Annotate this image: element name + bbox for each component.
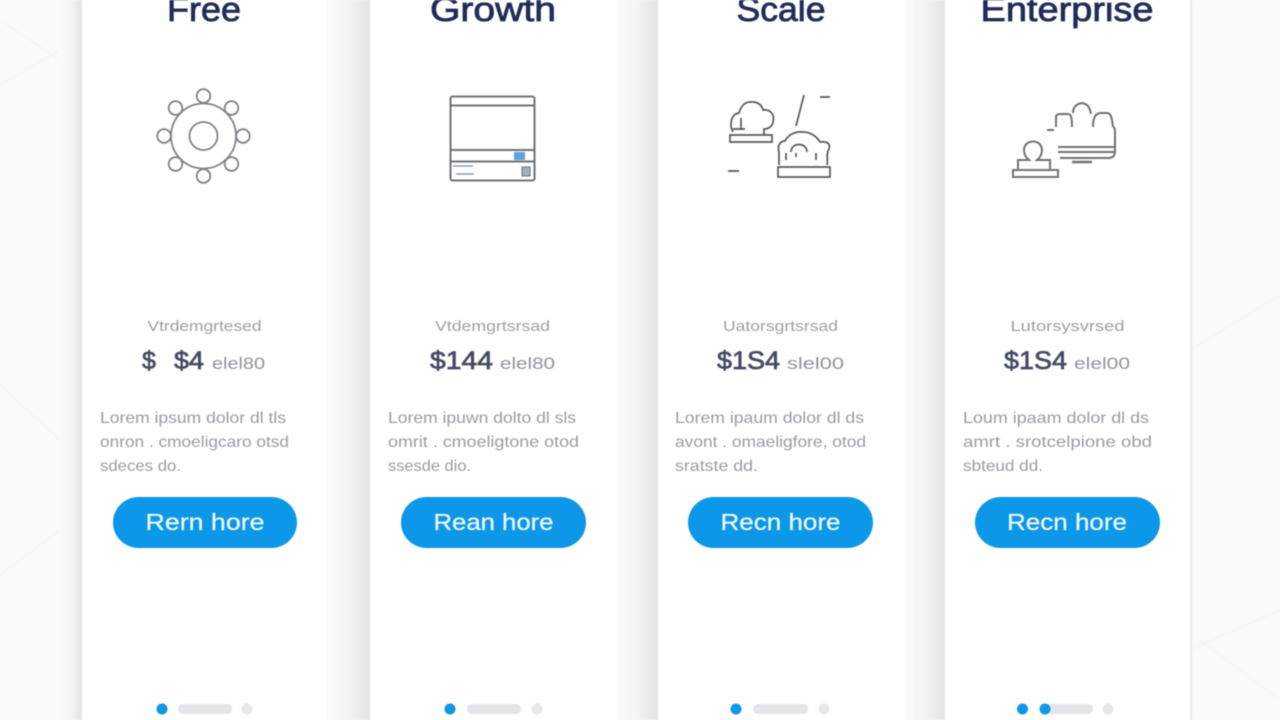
description: sratste dd.: [675, 458, 758, 475]
pagination dots: [730, 704, 830, 714]
description: sbteud dd.: [963, 458, 1043, 475]
description: ssesde dio.: [388, 458, 471, 475]
price period: slel00: [787, 354, 844, 373]
panel: Enterprise plan: [945, 0, 1190, 720]
icon: gear of circles: [157, 89, 250, 183]
button: Read more: [113, 497, 297, 548]
price: $: [142, 347, 156, 375]
price: [142, 347, 265, 375]
panel: Growth plan: [370, 0, 616, 720]
plan label: Vtrdemgrtesed: [148, 318, 262, 335]
button: Read more: Rern hore: [146, 509, 264, 535]
button: Read more: [401, 497, 586, 548]
price period: elel00: [1074, 354, 1130, 373]
price: $4: [174, 347, 204, 375]
price: $1S4: [717, 347, 780, 375]
price: $144: [430, 347, 493, 375]
description: [963, 410, 1152, 475]
description: [100, 410, 289, 475]
icon: browser window: [450, 96, 534, 180]
description: Loum ipaam dolor dl ds: [963, 410, 1149, 427]
button: Read more: Rean hore: [434, 509, 554, 535]
description: [388, 410, 579, 475]
description: Lorem ipuwn dolto dl sls: [388, 410, 576, 427]
panel: Free plan: [82, 0, 327, 720]
plan label: Uatorsgrtsrsad: [723, 318, 838, 335]
description: Lorem ipsum dolor dl tls: [100, 410, 286, 427]
pagination dots: [444, 704, 542, 714]
button: Read more: [975, 497, 1160, 548]
description: omrit . cmoeligtone otod: [388, 434, 579, 451]
plan label: Lutorsysvrsed: [1010, 318, 1124, 335]
panel: Scale plan: [658, 0, 904, 720]
pagination dots: [156, 704, 252, 714]
button: Read more: [688, 497, 873, 548]
description: [675, 410, 866, 475]
price: $1S4: [1004, 347, 1067, 375]
pagination dots: [1017, 704, 1114, 714]
button: Read more: Recn hore: [720, 509, 840, 535]
button: Read more: Recn hore: [1007, 509, 1127, 535]
description: Lorem ipaum dolor dl ds: [675, 410, 864, 427]
description: sdeces do.: [100, 458, 181, 475]
icon: person at desk with monitor: [1013, 103, 1115, 177]
price: elel80: [212, 354, 265, 373]
description: amrt . srotcelpione obd: [963, 434, 1152, 451]
description: onron . cmoeligcaro otsd: [100, 434, 289, 451]
icon: sketched buildings: [728, 95, 830, 177]
plan label: Vtdemgrtsrsad: [435, 318, 550, 335]
description: avont . omaeligfore, otod: [675, 434, 866, 451]
price period: elel80: [500, 354, 555, 373]
